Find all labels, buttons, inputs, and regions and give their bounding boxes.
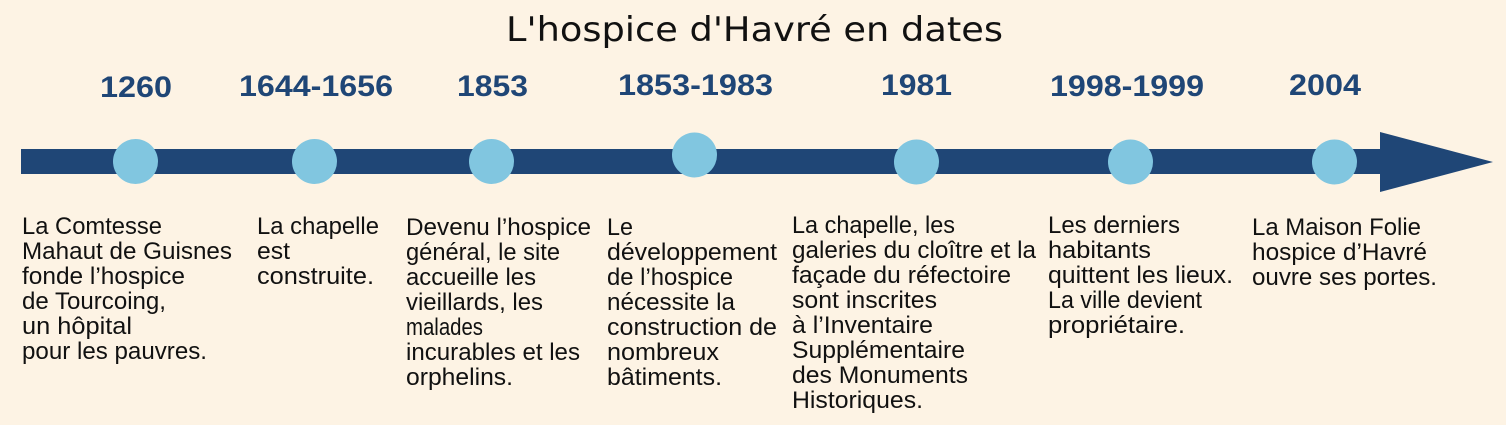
text: 1853-1983: nécessite la (607, 289, 736, 316)
text: 1981: La chapelle, les (792, 212, 955, 239)
text: 1853: malades (406, 314, 483, 341)
text: 1260: Mahaut de Guisnes (22, 238, 232, 265)
text: 1853-1983: Le (607, 214, 633, 241)
text: 1260: de Tourcoing, (22, 288, 166, 315)
text: 2004: ouvre ses portes. (1252, 264, 1437, 291)
year: 1998-1999: 1998-1999 (1050, 70, 1204, 103)
text: 1644-1656 (257, 213, 379, 290)
text: 1853: incurables et les (406, 339, 580, 366)
text: 1981: à l’Inventaire (792, 312, 933, 339)
text: 1981: Supplémentaire (792, 337, 965, 364)
year: 1853: 1853 (457, 70, 528, 103)
text: 2004: hospice d’Havré (1252, 239, 1427, 266)
text: 1853-1983 (607, 214, 777, 391)
year: 1260: 1260 (100, 71, 172, 104)
text: 1260: pour les pauvres. (22, 338, 207, 365)
text: 1853-1983: développement (607, 239, 777, 266)
text: 1853: orphelins. (406, 364, 513, 391)
text: 1260 (22, 213, 232, 365)
year: 1981: 1981 (881, 69, 952, 102)
text: 1981: galeries du cloître et la (792, 237, 1037, 264)
marker: 1981 (894, 140, 939, 184)
year: 1853-1983: 1853-1983 (618, 69, 773, 102)
text: 1853: Devenu l’hospice (406, 214, 591, 241)
text: 1260: La Comtesse (22, 213, 162, 240)
text: 1853-1983: de l’hospice (607, 264, 733, 291)
marker: 1644-1656 (292, 139, 337, 184)
text: 1981 (792, 212, 1037, 414)
text: 2004: La Maison Folie (1252, 214, 1421, 241)
text: 2004 (1252, 214, 1437, 291)
title: L'hospice d'Havré en dates (506, 10, 1003, 50)
marker: 1853 (469, 139, 514, 184)
text: 1998-1999: habitants (1048, 237, 1151, 264)
text: 1998-1999 (1048, 212, 1233, 339)
marker: 1853-1983 (672, 132, 717, 178)
text: 1998-1999: propriétaire. (1048, 312, 1185, 339)
text: 1981: des Monuments (792, 362, 968, 389)
marker: 1260 (113, 139, 158, 184)
marker: 2004 (1312, 140, 1357, 184)
text: 1853-1983: construction de (607, 314, 777, 341)
text: 1998-1999: Les derniers (1048, 212, 1180, 239)
text: 1644-1656: La chapelle (257, 213, 379, 240)
text: 1260: fonde l’hospice (22, 263, 185, 290)
text: 1998-1999: La ville devient (1048, 287, 1202, 314)
text: 1853: vieillards, les (406, 289, 543, 316)
year: 2004: 2004 (1289, 69, 1361, 102)
text: 1644-1656: est (257, 238, 290, 265)
text: 1853: général, le site (406, 239, 560, 266)
text: 1644-1656: construite. (257, 263, 374, 290)
timeline arrow (21, 132, 1493, 192)
text: 1981: sont inscrites (792, 287, 937, 314)
text: 1853: accueille les (406, 264, 536, 291)
text: 1981: Historiques. (792, 387, 923, 414)
text: 1853-1983: nombreux (607, 339, 719, 366)
year: 1644-1656: 1644-1656 (239, 70, 393, 103)
marker: 1998-1999 (1108, 140, 1153, 184)
text: 1981: façade du réfectoire (792, 262, 1011, 289)
text: 1998-1999: quittent les lieux. (1048, 262, 1233, 289)
text: 1260: un hôpital (22, 313, 132, 340)
text: 1853-1983: bâtiments. (607, 364, 722, 391)
text: 1853 (406, 214, 591, 391)
